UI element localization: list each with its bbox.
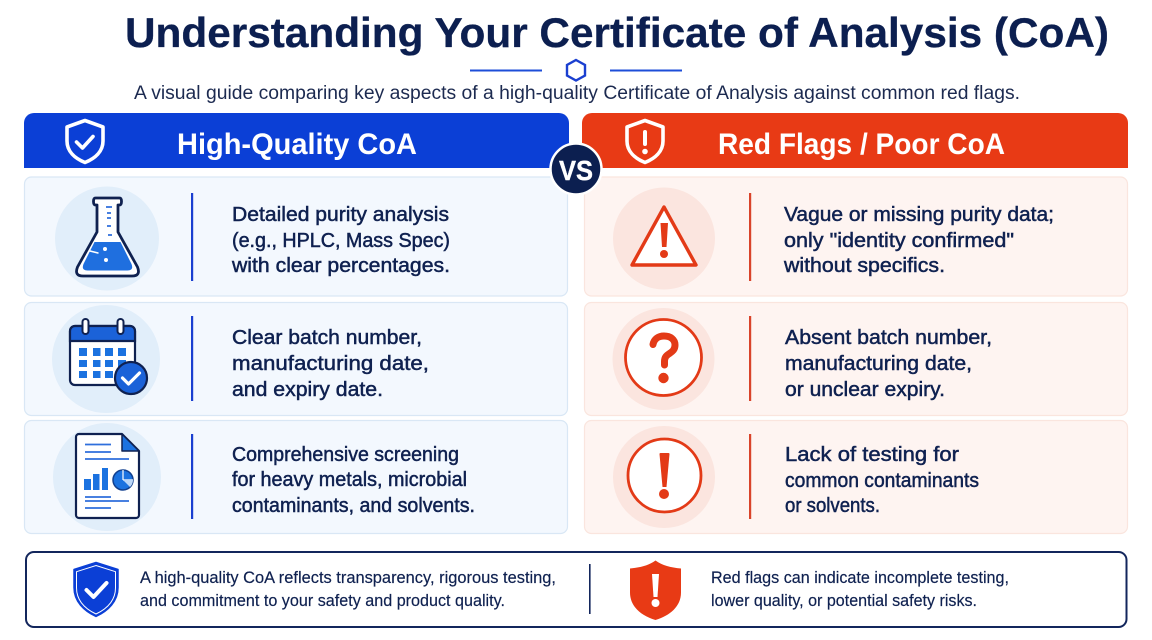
icon: red shield exclamation <box>630 560 681 620</box>
summary text: red flags: Red flags can indicate incomplete testing, <box>711 569 1009 587</box>
summary text: red flags: lower quality, or potential safety risks. <box>711 592 977 610</box>
heading: Red Flags / Poor CoA <box>718 128 1005 161</box>
text: only "identity confirmed" <box>784 229 1014 252</box>
text: Vague or missing purity data; <box>784 203 1054 226</box>
text: Lack of testing for <box>785 443 959 466</box>
card: vague purity data <box>584 177 1128 296</box>
icon: flask <box>77 198 138 276</box>
card: comprehensive screening <box>24 420 568 534</box>
icon: shield exclamation <box>627 120 663 162</box>
text: (e.g., HPLC, Mass Spec) <box>232 229 450 252</box>
card: absent batch number <box>584 302 1128 416</box>
badge: VS: VS <box>559 155 593 186</box>
icon: exclamation circle <box>628 439 701 512</box>
text: Absent batch number, <box>785 326 992 349</box>
text: without specifics. <box>783 254 945 277</box>
text: or solvents. <box>785 494 880 517</box>
text: contaminants, and solvents. <box>232 494 475 517</box>
summary text: high quality: A high-quality CoA reflects transparency, rigorous testing, <box>140 569 556 587</box>
icon: report document <box>76 434 139 518</box>
text: or unclear expiry. <box>785 378 945 401</box>
panel: High-Quality CoA column <box>24 113 569 534</box>
subtitle: A visual guide comparing key aspects of a high-quality Certificate of Analysis against common red flags. <box>134 83 1020 104</box>
header: High-Quality CoA <box>24 113 569 168</box>
icon: question mark circle <box>626 320 702 396</box>
card: purity analysis <box>24 177 568 296</box>
icon: calendar with check <box>70 319 147 394</box>
text: for heavy metals, microbial <box>232 468 467 491</box>
summary text: high quality: and commitment to your safety and product quality. <box>140 592 505 610</box>
panel: bottom summary <box>26 552 1126 627</box>
text: Detailed purity analysis <box>232 203 449 226</box>
badge: VS <box>550 144 602 194</box>
text: manufacturing date, <box>232 352 429 375</box>
text: Comprehensive screening <box>232 443 459 466</box>
text: with clear percentages. <box>231 254 450 277</box>
icon: shield check <box>67 120 103 162</box>
text: and expiry date. <box>232 378 383 401</box>
icon: warning triangle <box>632 207 696 265</box>
text: manufacturing date, <box>785 352 972 375</box>
title: Understanding Your Certificate of Analysis (CoA) <box>125 9 1109 56</box>
card: lack of testing <box>584 420 1128 534</box>
icon: blue shield check <box>74 562 118 616</box>
heading: High-Quality CoA <box>177 128 417 161</box>
text: common contaminants <box>785 469 979 492</box>
header: Red Flags / Poor CoA <box>582 113 1128 168</box>
card: batch and dates <box>24 302 568 416</box>
title ornament: lines and hexagon <box>470 60 682 80</box>
panel: Red Flags column <box>582 113 1128 534</box>
text: Clear batch number, <box>232 326 422 349</box>
